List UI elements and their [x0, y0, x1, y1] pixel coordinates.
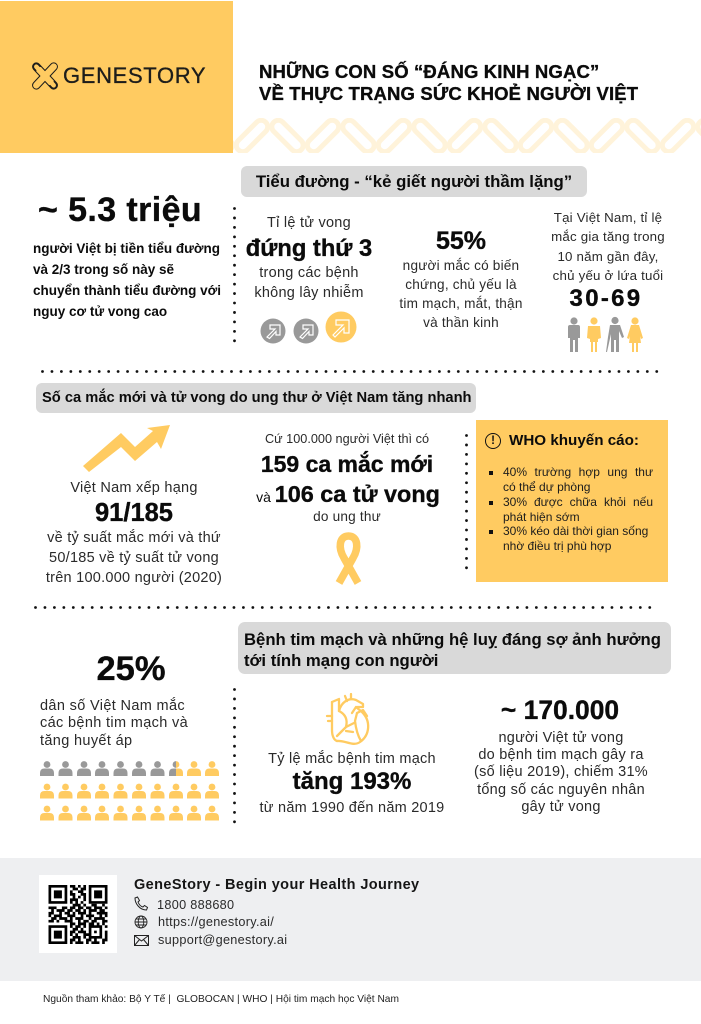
icon: warning: !: [491, 435, 495, 447]
icon: logo: [32, 62, 58, 90]
list item 2: 30% được chữa khỏi nếu: [503, 495, 653, 509]
text: complications: tim mạch, mắt, thận: [399, 296, 523, 311]
decorative wave pattern: [233, 118, 701, 153]
heading: cardiovascular: Bệnh tim mạch và những hệ luỵ đáng sợ ảnh hưởng: [244, 630, 661, 649]
text: rising incidence: mắc gia tăng trong: [551, 229, 665, 244]
icon: warning: [485, 433, 501, 449]
text: deaths: (số liệu 2019), chiếm 31%: [474, 764, 648, 780]
icon: rising arrow: [83, 425, 170, 472]
text: complications: chứng, chủ yếu là: [405, 277, 517, 292]
panel: diabetes: [33, 166, 665, 352]
icon: mail: [134, 935, 149, 946]
list item 1: có thể dự phòng: [503, 480, 590, 494]
text: prediabetes: [33, 241, 221, 319]
title: [258, 60, 638, 104]
text: prevalence: Tỷ lệ mắc bệnh tim mạch: [268, 751, 436, 767]
stat: 25%: 25%: [96, 650, 166, 688]
list item 3: nhờ điều trị phù hợp: [503, 539, 611, 553]
list item 2: [489, 495, 653, 524]
text: per 100000: Cứ 100.000 người Việt thì có: [265, 432, 429, 446]
QR code: [39, 875, 117, 953]
title: NHỮNG CON SỐ “ĐÁNG KINH NGẠC”: [259, 61, 599, 82]
divider vertical 2: [465, 434, 468, 570]
text: deaths: [474, 730, 648, 815]
text: ranking detail: trên 100.000 người (2020): [46, 570, 222, 586]
heading: WHO: WHO khuyến cáo:: [509, 432, 639, 449]
chart: pictogram 25 percent: [40, 761, 219, 820]
text: ranking detail: [46, 529, 222, 586]
text: website: https://genestory.ai/: [158, 915, 274, 929]
list item 1: 40% trường hợp ung thư: [503, 465, 653, 479]
title: VỀ THỰC TRẠNG SỨC KHOẺ NGƯỜI VIỆT: [259, 82, 638, 104]
logo wordmark: GENESTORY: [63, 63, 206, 88]
stat: 193%: tăng 193%: [293, 768, 411, 795]
heading: diabetes: [241, 166, 587, 197]
footer heading: GeneStory - Begin your Health Journey: [134, 877, 420, 893]
text: ranking detail: về tỷ suất mắc mới và thứ: [47, 530, 221, 546]
text: complications: người mắc có biến: [403, 258, 519, 273]
list item 2: phát hiện sớm: [503, 510, 580, 524]
text: deaths: do bệnh tim mạch gây ra: [478, 747, 644, 763]
text: due to cancer: do ung thư: [313, 509, 381, 524]
text: prediabetes: nguy cơ tử vong cao: [33, 304, 167, 319]
icon: heart: [326, 692, 370, 745]
text: population: các bệnh tim mạch và: [40, 715, 188, 731]
text: deaths: tổng số các nguyên nhân: [477, 782, 645, 798]
divider vertical 3: [233, 688, 236, 824]
text: rising incidence: Tại Việt Nam, tỉ lệ: [554, 210, 662, 225]
stat: third in mortality: Tỉ lệ tử vong: [267, 215, 351, 231]
stat: 55%: 55%: [436, 227, 486, 255]
panel: cardiovascular: [40, 622, 671, 824]
list item 3: 30% kéo dài thời gian sống: [503, 524, 648, 538]
icon: phone: [134, 896, 148, 910]
icon: people age group: [568, 316, 643, 352]
stat: new cases: 159 ca mắc mới: [261, 451, 433, 477]
list item 3: [489, 524, 648, 553]
list item 1: [489, 465, 653, 494]
stat: 91/185: 91/185: [95, 499, 173, 527]
text: phone: 1800 888680: [157, 898, 234, 912]
heading: cancer: Số ca mắc mới và tử vong do ung thư ở Việt Nam tăng nhanh: [42, 390, 472, 406]
heading: cardiovascular: [238, 622, 671, 674]
text: population: tăng huyết áp: [40, 733, 132, 749]
heading: cardiovascular: tới tính mạng con người: [244, 651, 438, 670]
text: rising incidence: [551, 210, 665, 283]
text: deaths: người Việt tử vong: [498, 730, 624, 746]
text: non-communicable: trong các bệnh: [259, 265, 359, 281]
icon: globe: [134, 916, 148, 928]
stat: 5.3 million: ~ 5.3 triệu: [38, 191, 202, 229]
text: rising incidence: 10 năm gần đây,: [557, 249, 659, 264]
text: prediabetes: và 2/3 trong số này sẽ: [33, 262, 174, 277]
text: prediabetes: chuyển thành tiểu đường với: [33, 283, 221, 298]
text: ranking: Việt Nam xếp hạng: [70, 480, 198, 496]
text: email: support@genestory.ai: [158, 933, 287, 947]
panel: cancer: [36, 383, 668, 586]
text: complications: và thần kinh: [423, 315, 499, 330]
icon: ribbon: [336, 532, 362, 585]
text: period: từ năm 1990 đến năm 2019: [260, 800, 444, 816]
stat value: đứng thứ 3: [246, 236, 372, 262]
text: rising incidence: chủ yếu ở lứa tuổi: [553, 268, 663, 283]
panel: WHO recommendation: [476, 420, 668, 582]
text: deaths: gây tử vong: [521, 799, 601, 815]
divider horizontal 1: [41, 370, 658, 373]
text: non-communicable: không lây nhiễm: [254, 285, 364, 301]
divider vertical 1: [233, 207, 236, 342]
sources: Nguồn tham khảo: Bộ Y Tế | GLOBOCAN | WHO | Hội tim mạch học Việt Nam: [43, 994, 399, 1005]
stat: 170000: ~ 170.000: [501, 695, 619, 725]
text: prediabetes: người Việt bị tiền tiểu đường: [33, 241, 220, 256]
stat: deaths: và 106 ca tử vong: [256, 481, 440, 507]
text: ranking detail: 50/185 về tỷ suất tử vong: [49, 550, 219, 566]
text: non-communicable: [254, 265, 364, 301]
heading: cancer: [36, 383, 476, 413]
text: population: dân số Việt Nam mắc: [40, 698, 185, 714]
icon: rank arrows: [260, 312, 356, 344]
header block: logo panel: [0, 1, 233, 153]
divider horizontal 2: [34, 606, 652, 609]
panel: footer contact: [0, 858, 701, 981]
heading: diabetes: Tiểu đường - “kẻ giết người thầm lặng”: [256, 172, 572, 191]
text: population: [40, 697, 188, 749]
text: complications: [399, 258, 523, 330]
stat: 30-69: 30-69: [570, 285, 642, 312]
